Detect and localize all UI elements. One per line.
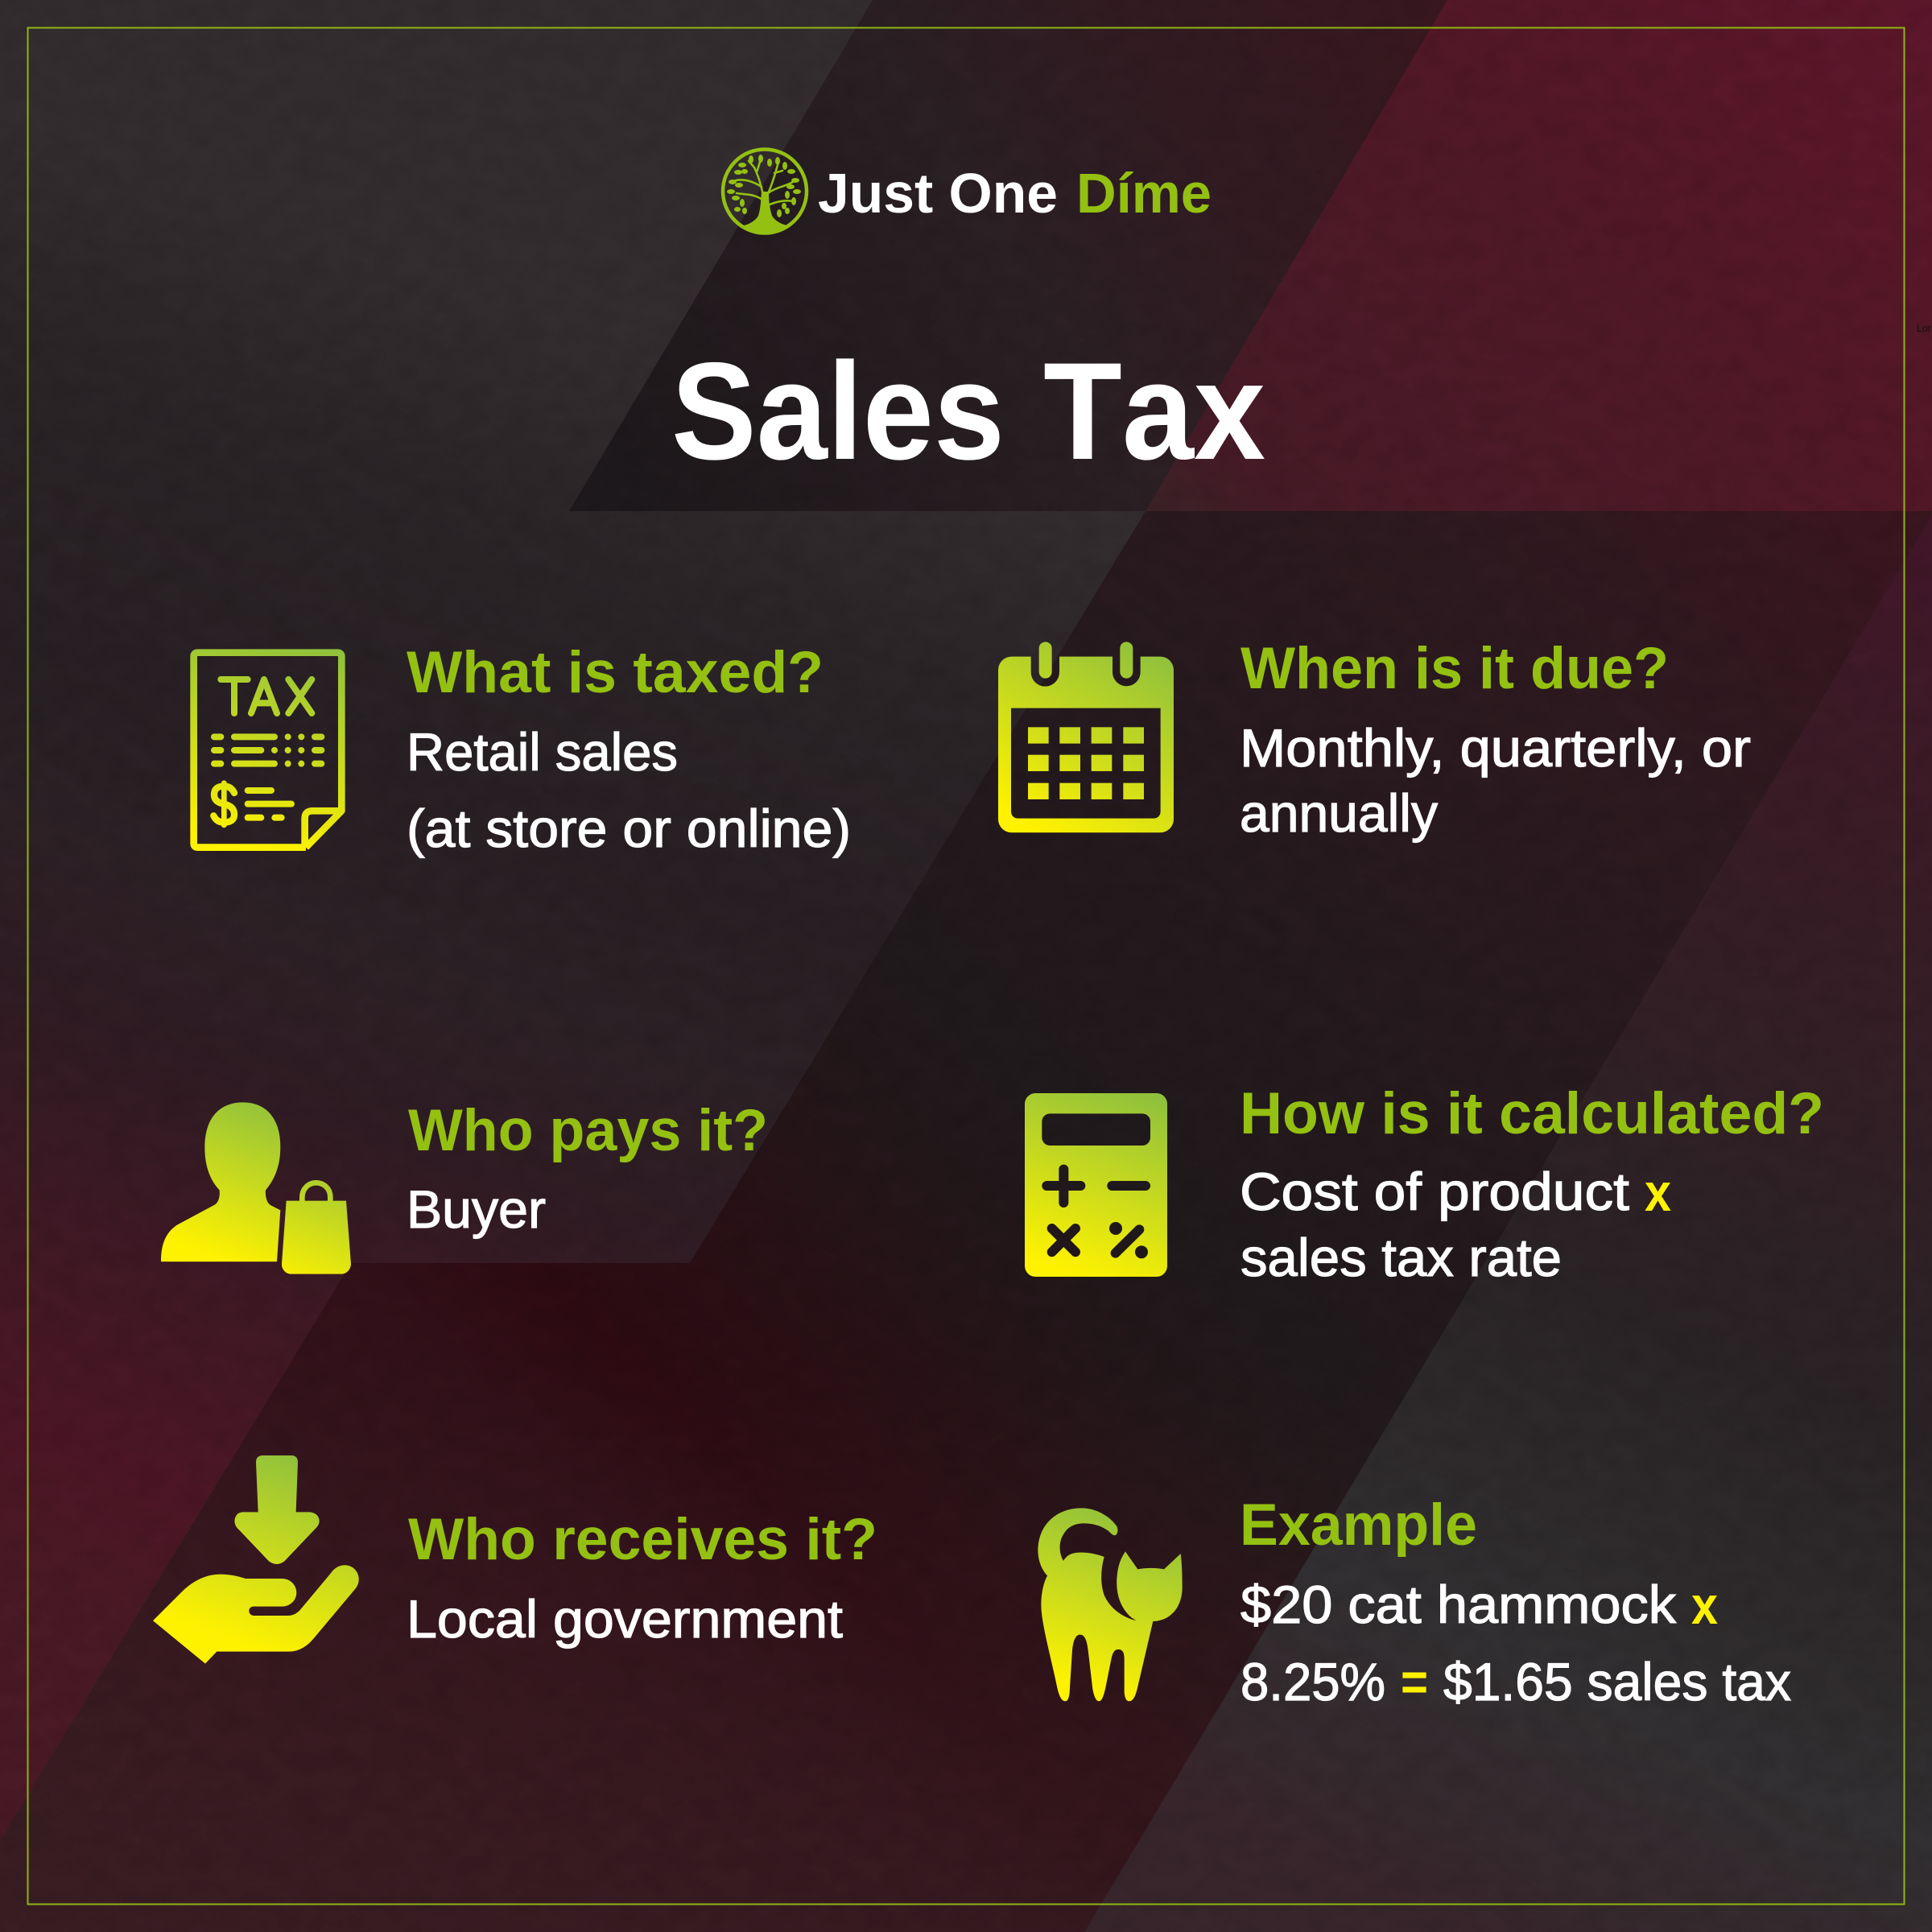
panel: how is it calculated (1025, 1081, 1824, 1287)
body text: Local government (407, 1589, 843, 1649)
title: Sales (671, 334, 1005, 489)
icon: tax document (194, 653, 341, 848)
heading: What is taxed? (407, 640, 824, 705)
icon: hand receiving arrow (153, 1455, 359, 1664)
body text (1240, 718, 1751, 843)
icon: logo tree (723, 150, 807, 234)
title (671, 334, 1265, 489)
heading: When is it due? (1241, 636, 1669, 701)
heading: Example (1240, 1492, 1477, 1558)
logo: Díme (1076, 162, 1212, 225)
body text: Cost of product (1240, 1162, 1629, 1221)
body text: sales tax rate (1241, 1228, 1562, 1287)
body text: Buyer (407, 1179, 546, 1239)
body text (1240, 1162, 1671, 1287)
body text: x (1645, 1162, 1671, 1222)
body text: $1.65 sales tax (1443, 1652, 1791, 1711)
icon: calendar (998, 642, 1174, 832)
body text: $20 cat hammock (1241, 1575, 1677, 1634)
icon: buyer with shopping bag (161, 1102, 351, 1274)
body text: x (1691, 1575, 1718, 1635)
body text: = (1401, 1652, 1428, 1711)
panel: what is taxed (194, 640, 851, 858)
title: Tax (1043, 334, 1265, 489)
logo wordmark: Just One (818, 162, 1058, 225)
panel: when is it due (998, 636, 1751, 843)
heading: Who pays it? (408, 1098, 768, 1163)
body text (407, 722, 851, 858)
panel: who pays it (161, 1098, 768, 1274)
logo (723, 150, 1212, 234)
body text: 8.25% (1241, 1652, 1385, 1711)
body text (1241, 1575, 1791, 1711)
panel: who receives it (153, 1455, 877, 1664)
heading: Who receives it? (408, 1507, 877, 1572)
body text: (at store or online) (407, 799, 851, 858)
body text: Retail sales (407, 722, 678, 782)
heading: How is it calculated? (1240, 1081, 1824, 1146)
icon: calculator (1025, 1093, 1167, 1277)
body text: annually (1240, 783, 1438, 843)
body text: Monthly, quarterly, or (1240, 718, 1751, 778)
icon: cat (1038, 1508, 1183, 1701)
panel: example (1038, 1492, 1791, 1711)
